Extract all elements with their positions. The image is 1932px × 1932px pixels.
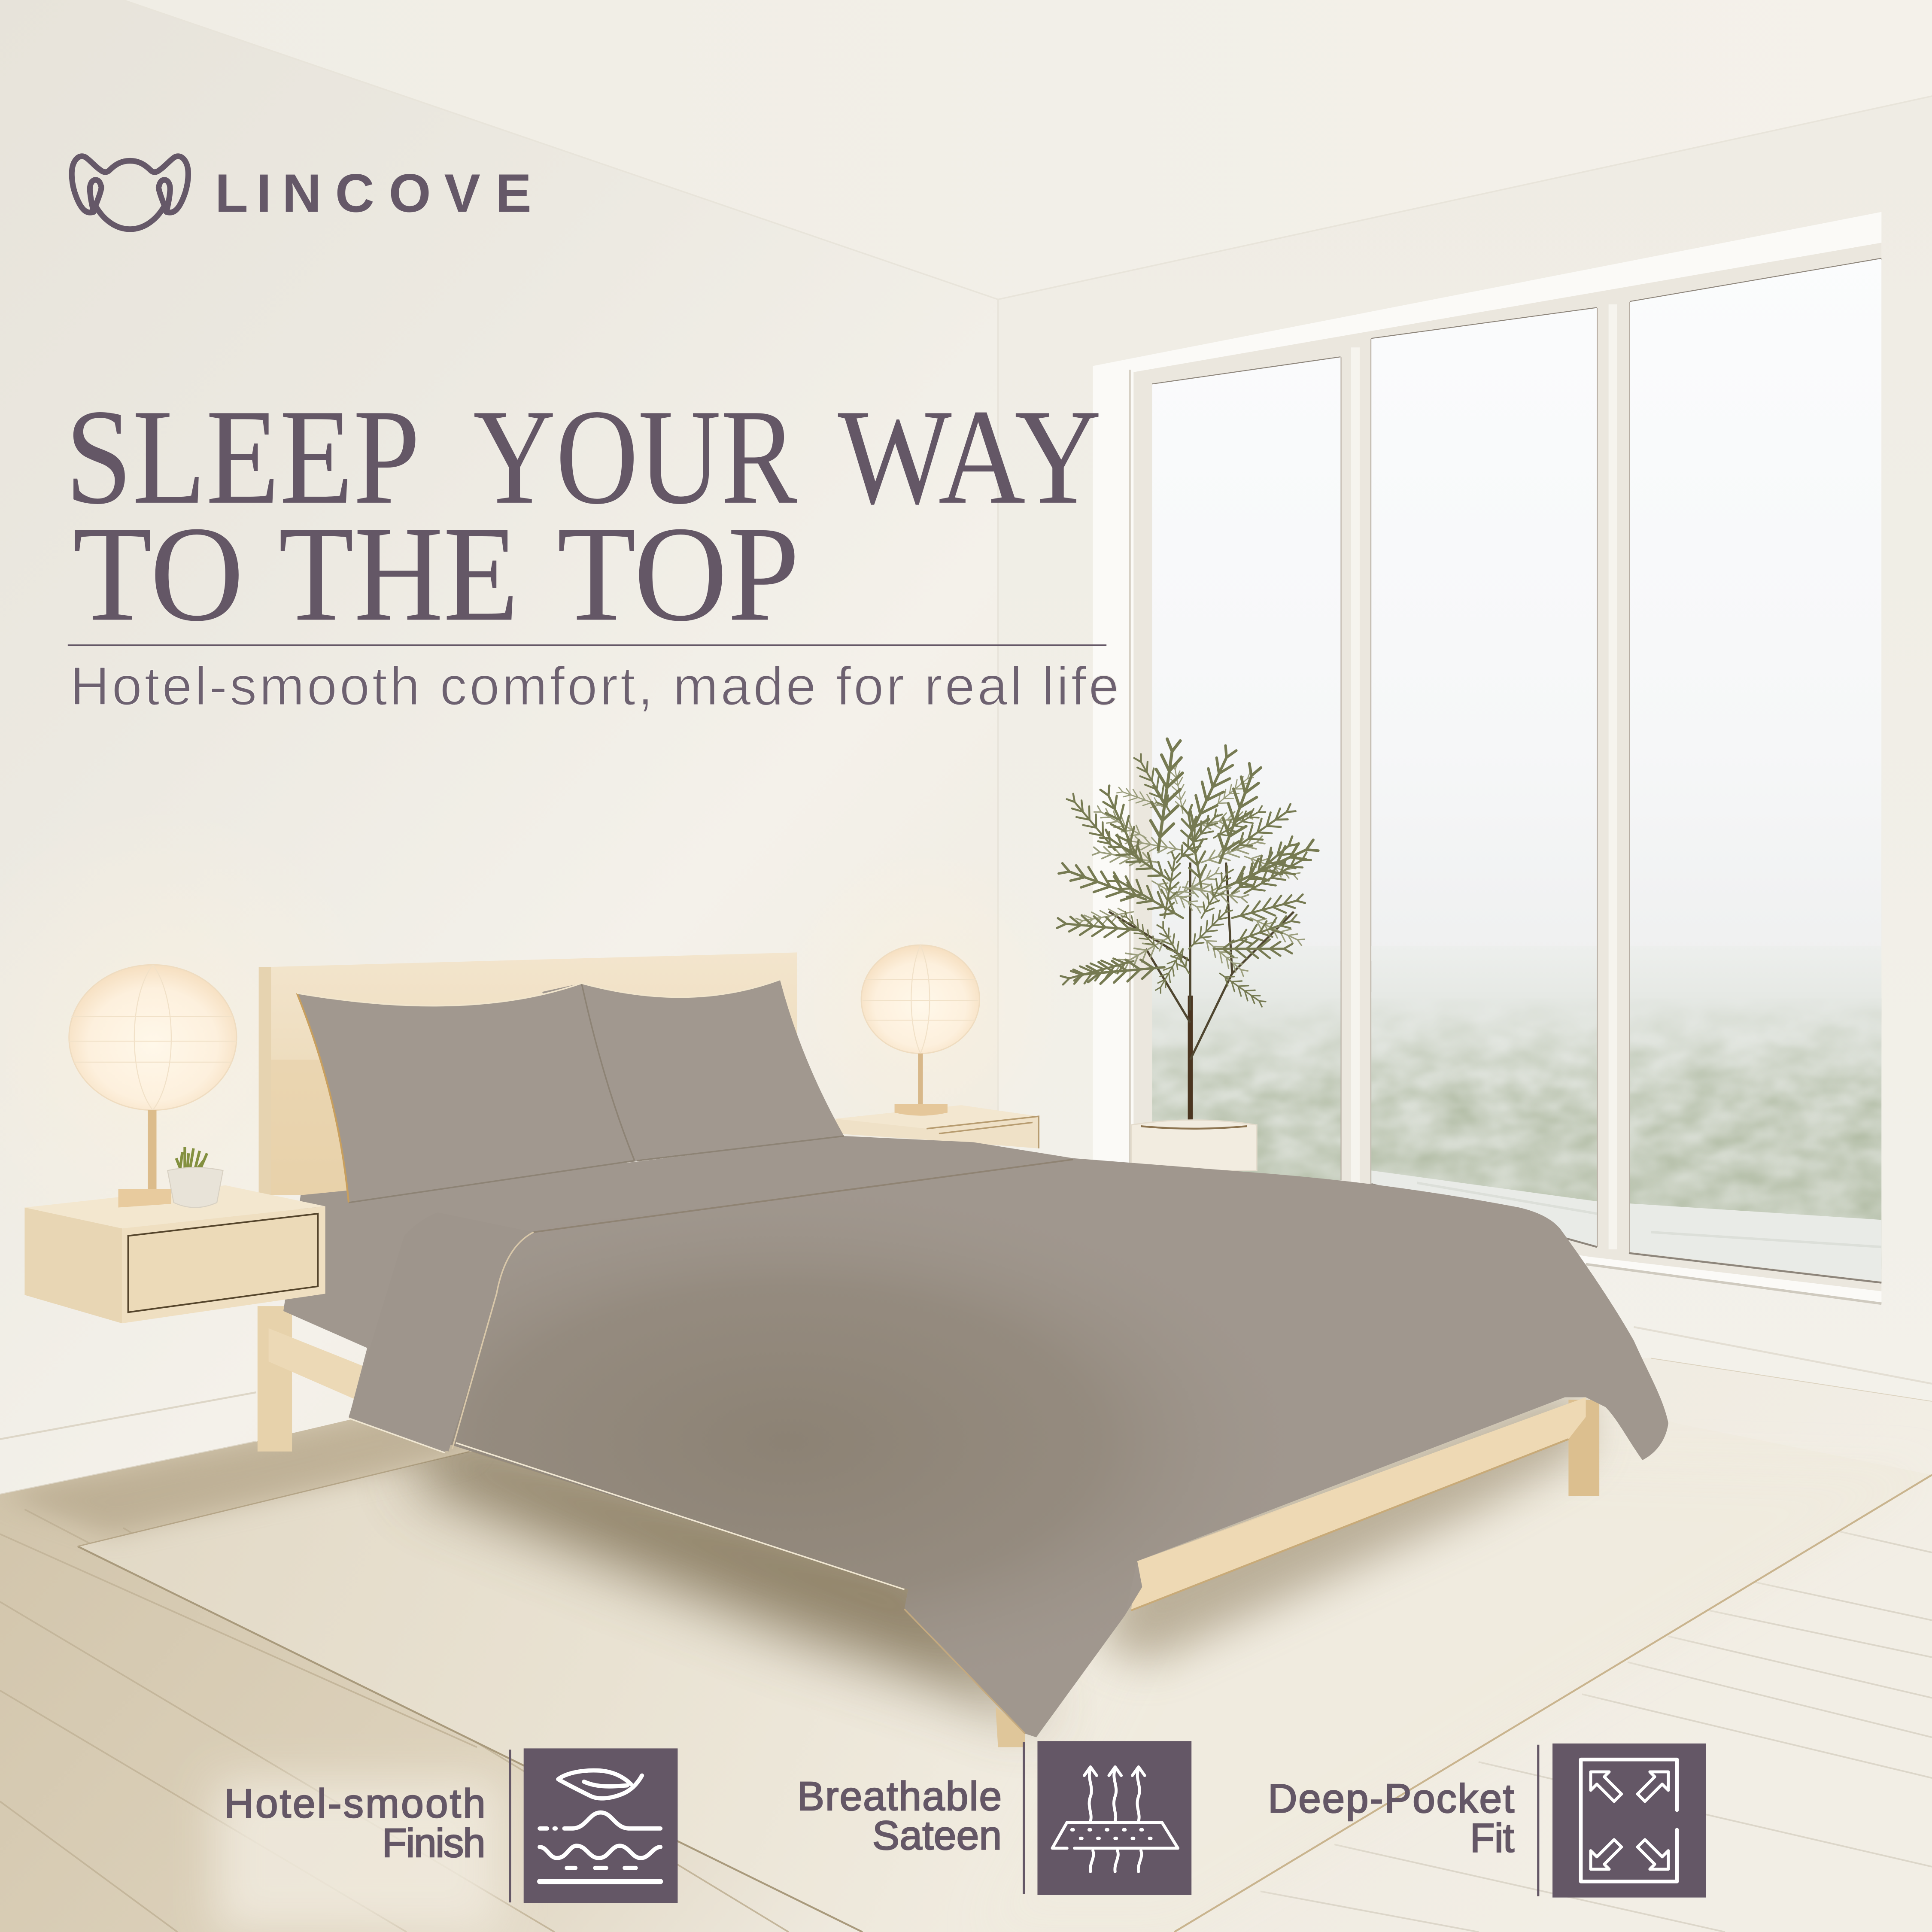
label: Sateen — [872, 1813, 1002, 1859]
wordmark: LINCOVE — [215, 163, 532, 224]
window with city view — [1093, 212, 1885, 1303]
floor with planks — [0, 1358, 1932, 1932]
drawer front — [128, 1214, 318, 1312]
left lamp — [69, 965, 237, 1207]
potted succulent — [167, 1147, 223, 1207]
planter — [1131, 1120, 1257, 1170]
left leg and rail — [258, 1306, 292, 1452]
label: Breathable — [797, 1774, 1002, 1819]
label — [1268, 1776, 1514, 1861]
subheading: Hotel-smooth comfort, made for real life — [70, 656, 1119, 717]
headline: WAY — [838, 381, 1102, 532]
icon: air rising through fabric — [1037, 1741, 1191, 1895]
duvet turned-down panel — [349, 1212, 534, 1452]
bedding: sheet and duvet — [283, 1136, 1668, 1738]
label — [797, 1774, 1002, 1859]
logo icon — [72, 156, 188, 229]
label: Deep-Pocket — [1268, 1776, 1514, 1822]
right lamp — [861, 945, 980, 1116]
right leg — [1568, 1400, 1599, 1496]
label: Fit — [1470, 1815, 1514, 1861]
halo behind feature text — [216, 1780, 499, 1932]
label — [224, 1781, 486, 1866]
rug — [0, 1386, 1932, 1932]
feature: breathable sateen — [797, 1741, 1191, 1895]
rug shadow — [419, 1386, 1589, 1725]
icon: stretching corners — [1552, 1744, 1706, 1898]
front leg — [996, 1707, 1025, 1747]
panes and landscape — [1146, 246, 1885, 1291]
feature: hotel-smooth finish — [224, 1748, 677, 1903]
headline: TO — [73, 498, 244, 650]
label: Hotel-smooth — [224, 1781, 486, 1826]
feature: deep-pocket fit — [1268, 1744, 1706, 1898]
headline: SLEEP — [65, 381, 420, 532]
headline — [65, 381, 1102, 650]
label: Finish — [382, 1820, 486, 1866]
logo — [72, 156, 532, 229]
bed frame — [258, 1306, 1599, 1747]
headline rule — [68, 644, 1106, 646]
icon: leaf over smooth layers — [524, 1748, 677, 1903]
left nightstand — [24, 1185, 325, 1323]
headline: YOUR — [473, 381, 798, 532]
pillows — [297, 980, 844, 1203]
headline: TOP — [557, 498, 800, 650]
headline: THE — [279, 498, 519, 650]
side rail — [1131, 1397, 1586, 1610]
olive tree in planter — [1057, 738, 1321, 1170]
headboard — [259, 952, 797, 1195]
right nightstand — [835, 1105, 1039, 1148]
